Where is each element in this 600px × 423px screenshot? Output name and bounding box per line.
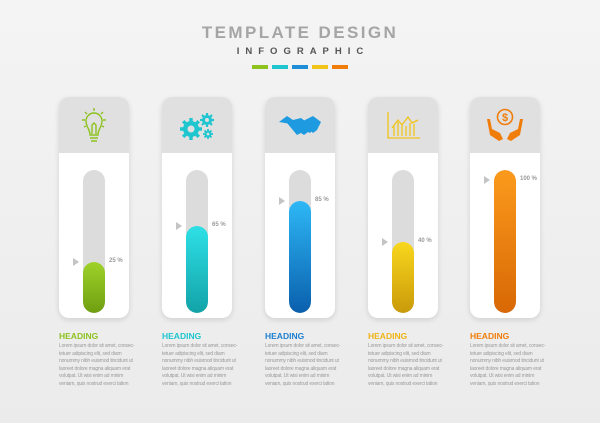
text block 4: laoreet dolore magna aliquam erat [368, 366, 439, 372]
text block 1: nonummy nibh euismod tincidunt ut [59, 358, 133, 364]
title: TEMPLATE DESIGN [202, 23, 398, 42]
text block 1: volutpat. Ut wisi enim ad minim [59, 373, 123, 379]
panel: card 1: 25 % [109, 258, 123, 264]
panel: card 3 [265, 97, 335, 318]
text block 5: tetuer adipiscing elit, sed diam [470, 351, 532, 357]
panel: card 3: 85 % [315, 197, 329, 203]
panel: card 2: 65 % [212, 222, 226, 228]
25% marker [73, 258, 79, 266]
text block 5: veniam, quis nostrud exerci tation [470, 381, 539, 387]
heading 4: HEADING [368, 331, 407, 341]
heading 2: HEADING [162, 331, 201, 341]
icon: handshake [279, 116, 321, 135]
text block 2: nonummy nibh euismod tincidunt ut [162, 358, 236, 364]
heading 5: HEADING [470, 331, 509, 341]
65% marker [176, 222, 182, 230]
text block 4: volutpat. Ut wisi enim ad minim [368, 373, 432, 379]
color legend bars [252, 65, 348, 69]
text block 3: Lorem ipsum dolor sit amet, consec- [265, 343, 340, 349]
icon: light bulb [82, 108, 106, 142]
text block 3: veniam, quis nostrud exerci tation [265, 381, 334, 387]
subtitle: INFOGRAPHIC [237, 46, 369, 57]
text block 2: laoreet dolore magna aliquam erat [162, 366, 233, 372]
panel: card 2 [162, 97, 232, 318]
text block 2: veniam, quis nostrud exerci tation [162, 381, 231, 387]
heading 1: HEADING [59, 331, 98, 341]
text block 5: Lorem ipsum dolor sit amet, consec- [470, 343, 545, 349]
text block 4: nonummy nibh euismod tincidunt ut [368, 358, 442, 364]
text block 3: laoreet dolore magna aliquam erat [265, 366, 336, 372]
40% marker [382, 238, 388, 246]
heading 3: HEADING [265, 331, 304, 341]
text block 5: volutpat. Ut wisi enim ad minim [470, 373, 534, 379]
text block 2: Lorem ipsum dolor sit amet, consec- [162, 343, 237, 349]
text block 3: volutpat. Ut wisi enim ad minim [265, 373, 329, 379]
text block 1: Lorem ipsum dolor sit amet, consec- [59, 343, 134, 349]
100% marker [484, 176, 490, 184]
text block 3: nonummy nibh euismod tincidunt ut [265, 358, 339, 364]
text block 4: tetuer adipiscing elit, sed diam [368, 351, 430, 357]
text block 5: laoreet dolore magna aliquam erat [470, 366, 541, 372]
text block 1: tetuer adipiscing elit, sed diam [59, 351, 121, 357]
text block 5 [470, 343, 546, 387]
text block 4: Lorem ipsum dolor sit amet, consec- [368, 343, 443, 349]
panel: card 4: 40 % [418, 238, 432, 244]
text block 1: veniam, quis nostrud exerci tation [59, 381, 128, 387]
icon: money hands: $ [502, 112, 508, 124]
icon: money hands [487, 108, 523, 141]
panel: card 5 [470, 97, 540, 318]
text block 4 [368, 343, 444, 387]
text block 3 [265, 343, 340, 387]
icon: chart [387, 112, 420, 139]
text block 4: veniam, quis nostrud exerci tation [368, 381, 437, 387]
text block 1 [59, 343, 134, 387]
85% marker [279, 197, 285, 205]
text block 2: tetuer adipiscing elit, sed diam [162, 351, 224, 357]
text block 3: tetuer adipiscing elit, sed diam [265, 351, 327, 357]
text block 1: laoreet dolore magna aliquam erat [59, 366, 130, 372]
text block 5: nonummy nibh euismod tincidunt ut [470, 358, 544, 364]
panel: card 4 [368, 97, 438, 318]
panel: card 1 [59, 97, 129, 318]
icon: gears [180, 113, 214, 140]
text block 2 [162, 343, 238, 387]
text block 2: volutpat. Ut wisi enim ad minim [162, 373, 226, 379]
panel: card 5: 100 % [520, 176, 537, 182]
